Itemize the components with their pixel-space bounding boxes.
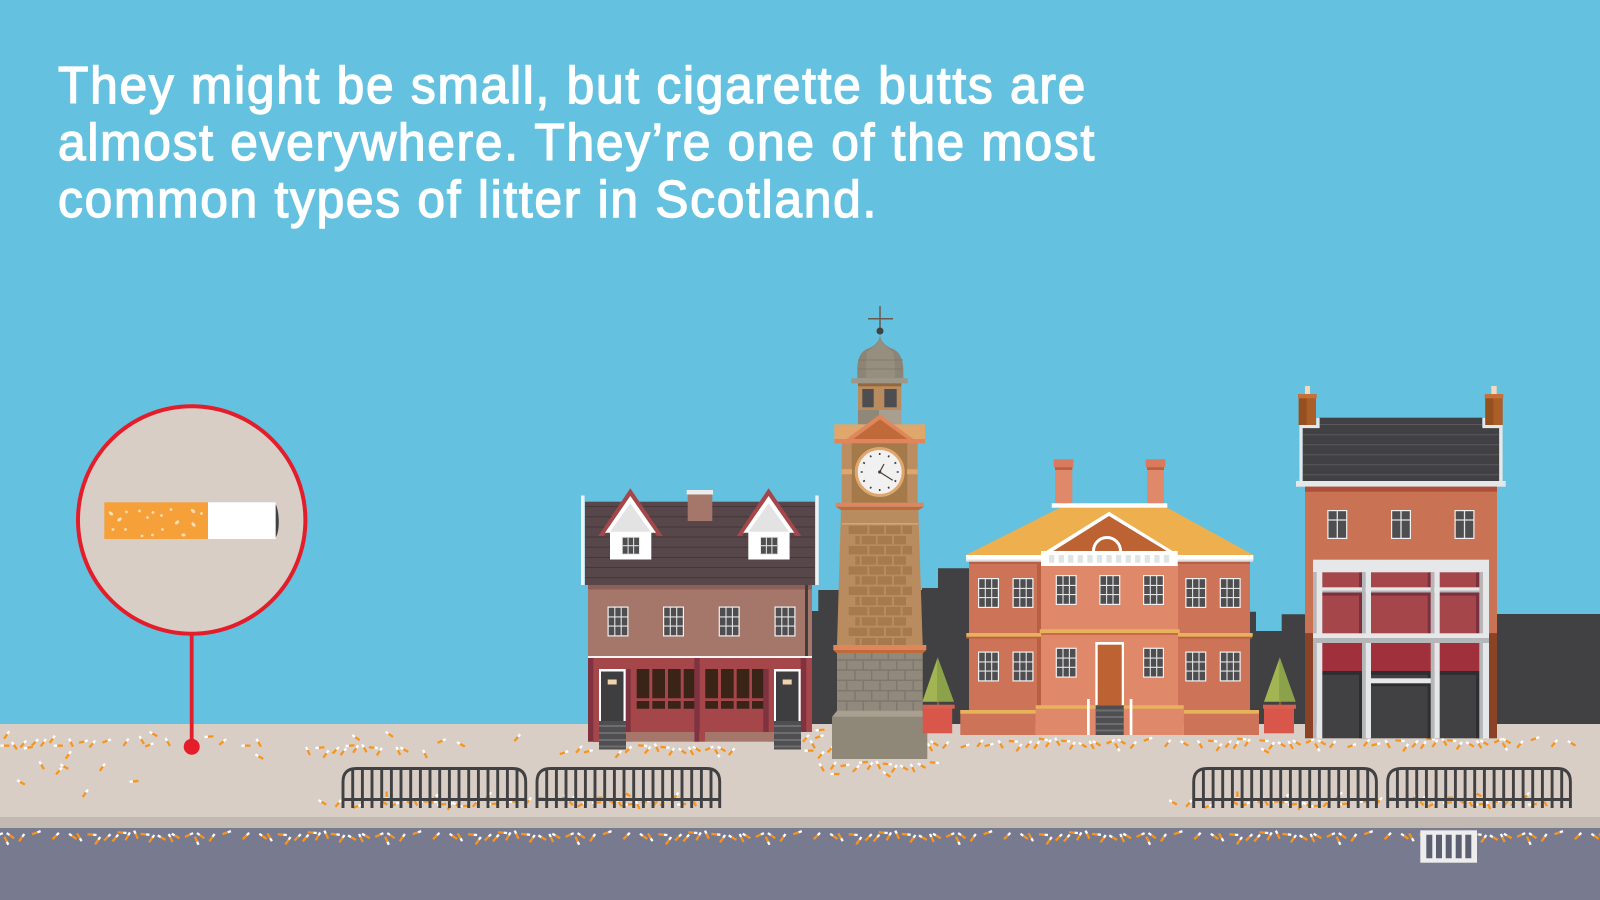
title text	[58, 57, 1096, 229]
kerb	[0, 817, 1600, 828]
title text: common types of litter in Scotland.	[58, 171, 878, 229]
shopfront	[588, 656, 812, 742]
windows	[978, 575, 1241, 682]
title text: almost everywhere. They’re one of the most	[58, 114, 1096, 172]
shop sign	[1322, 643, 1480, 671]
left steps	[599, 721, 626, 750]
callout line and dot	[184, 630, 200, 755]
fence 3	[1193, 768, 1376, 808]
tower base	[832, 711, 927, 717]
pediment	[834, 424, 925, 439]
shopfront building	[1296, 386, 1506, 738]
slate roof	[1319, 418, 1482, 430]
string courses	[966, 629, 1253, 638]
base walls	[960, 705, 1259, 735]
upper wall	[1305, 487, 1497, 633]
clock face	[855, 447, 905, 497]
shop glazing	[1322, 572, 1480, 634]
ground floor	[1322, 671, 1480, 738]
title text: They might be small, but cigarette butts are	[58, 57, 1087, 115]
roof	[585, 502, 815, 585]
chimneys	[1298, 386, 1503, 425]
planter left	[922, 657, 955, 733]
upper cornice	[836, 503, 924, 507]
icon: cigarette butt	[104, 502, 279, 539]
road	[0, 828, 1600, 900]
cigarette butts on the pavement, centre	[802, 728, 1251, 778]
left door	[599, 669, 626, 721]
clock tower	[832, 306, 927, 759]
cross finial	[868, 306, 893, 328]
shopfront frame	[1313, 560, 1489, 738]
chimneys	[1054, 459, 1165, 503]
pediment	[1041, 512, 1178, 556]
clock storey	[842, 443, 918, 503]
background skyline silhouette	[812, 568, 1600, 725]
upper windows	[608, 606, 796, 636]
steps and railings	[1087, 699, 1132, 735]
planter right	[1263, 657, 1296, 733]
house with dormers	[581, 488, 819, 750]
drain grate	[1420, 830, 1477, 863]
stone plinth	[837, 653, 923, 711]
frieze	[1041, 551, 1178, 566]
wings	[969, 558, 1041, 710]
fence 2	[537, 768, 720, 808]
lantern storey	[858, 383, 901, 410]
fence 4	[1387, 768, 1570, 808]
right steps	[774, 721, 801, 750]
dome	[857, 334, 903, 378]
right door	[774, 669, 801, 721]
upper wall	[588, 585, 812, 657]
fence 1	[343, 768, 526, 808]
windows	[1327, 510, 1474, 539]
chimney	[688, 494, 712, 521]
roof	[966, 508, 1253, 555]
door	[1095, 642, 1124, 706]
Georgian mansion	[960, 459, 1259, 735]
central block	[1041, 560, 1178, 706]
cigarette butts behind the fences	[318, 791, 1548, 810]
cigarette butts on the pavement, centre-left	[305, 731, 735, 759]
brick shaft	[837, 510, 923, 645]
cigarette butts on the road	[0, 830, 1600, 845]
pavement	[0, 724, 1600, 817]
cigarette butts on the pavement, left	[0, 731, 264, 798]
drainpipe	[805, 585, 808, 657]
magnifier circle	[78, 406, 305, 634]
eaves	[966, 555, 1253, 560]
cigarette butts on the pavement, right	[1259, 736, 1576, 754]
left dormer	[598, 488, 663, 560]
right dormer	[737, 488, 801, 560]
lower cornice	[833, 645, 926, 650]
